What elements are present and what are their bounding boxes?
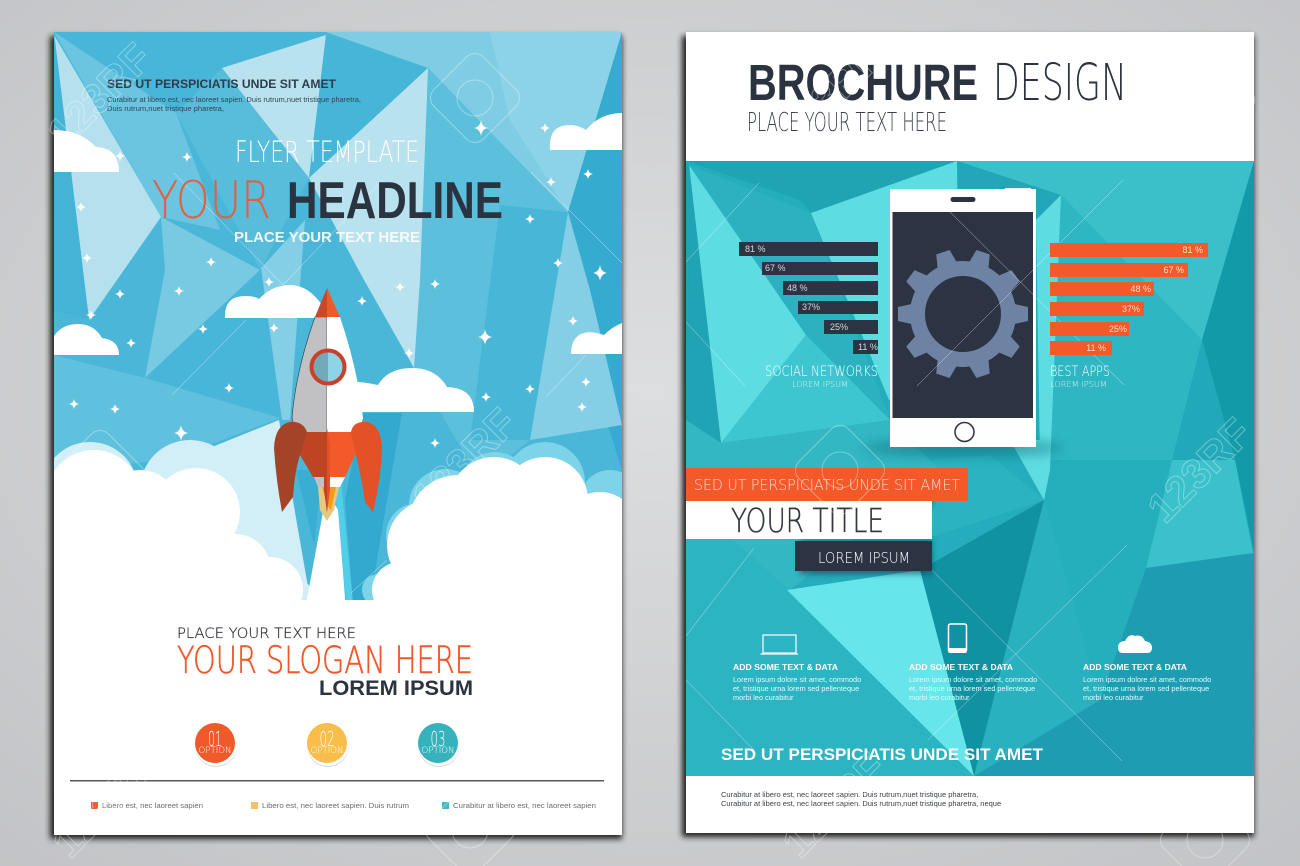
watermark marks: 123RF	[38, 34, 161, 156]
option badge 03	[418, 723, 460, 767]
intro text	[107, 97, 361, 113]
label: social networks: LOREM IPSUM	[792, 380, 848, 389]
bar chart: social networks: 11 %	[858, 342, 878, 352]
slogan block: LOREM IPSUM	[319, 677, 473, 700]
icon: phone	[948, 624, 966, 653]
bar chart: social networks: 81 %	[745, 244, 766, 254]
label: best apps: BEST APPS	[1050, 364, 1110, 380]
watermark marks: 123RF	[768, 34, 891, 156]
footer text: Curabitur at libero est, nec laoreet sapien. Duis rutrum,nuet tristique pharetra, neque	[721, 799, 1001, 808]
feature column 1: Lorem ipsum dolore sit amet, commodo	[733, 675, 861, 684]
smoke halo clouds	[54, 440, 622, 600]
headline: HEADLINE	[287, 172, 503, 230]
brochure title: BROCHURE	[748, 54, 978, 111]
feature column 3: ADD SOME TEXT & DATA	[1083, 662, 1187, 672]
phone mockup	[890, 188, 1036, 447]
intro text: Duis rutrum,nuet tristique pharetra,	[107, 106, 224, 113]
feature column 3: Lorem ipsum dolore sit amet, commodo	[1083, 675, 1211, 684]
watermark marks: 123RF	[43, 744, 166, 866]
option badge 01	[195, 723, 237, 767]
feature column 1: morbi leo curabitur	[733, 693, 794, 702]
legend	[91, 801, 596, 810]
feature column 2: ADD SOME TEXT & DATA	[909, 662, 1013, 672]
legend: Curabitur at libero est, nec laoreet sapien	[453, 801, 596, 810]
option badge 03: OPTION	[422, 746, 454, 756]
headline	[152, 171, 503, 231]
option badge 02	[307, 723, 349, 767]
option badge 02: 02	[320, 727, 334, 751]
label: social networks	[765, 364, 878, 389]
bar chart: best apps: 37%	[1122, 304, 1140, 314]
icon: rocket	[274, 288, 382, 521]
legend: Libero est, nec laoreet sapien	[102, 801, 203, 810]
feature column 3	[1083, 662, 1211, 702]
bottom heading: SED UT PERSPICIATIS UNDE SIT AMET	[721, 745, 1044, 764]
ribbon: dark	[795, 541, 932, 571]
heading: small intro: SED UT PERSPICIATIS UNDE SIT AMET	[107, 77, 337, 91]
slogan block	[177, 626, 473, 700]
bar chart: best apps: 81 %	[1182, 245, 1203, 255]
bar chart: social networks: 48 %	[787, 283, 808, 293]
watermark marks: 123RF	[773, 744, 896, 866]
ribbon: white title: YOUR TITLE	[731, 501, 884, 540]
bar chart: best apps: 11 %	[1086, 343, 1106, 353]
option badge 03: 03	[430, 727, 446, 751]
brochure subtitle: PLACE YOUR TEXT HERE	[747, 108, 947, 138]
bar chart: best apps	[1050, 243, 1208, 355]
label: best apps	[1050, 364, 1110, 389]
slogan block: PLACE YOUR TEXT HERE	[177, 626, 356, 642]
ribbon shadows	[700, 498, 932, 574]
panel: flyer page	[2, 32, 640, 839]
polygon sky background	[54, 32, 622, 612]
legend: Libero est, nec laoreet sapien. Duis rutrum	[262, 801, 409, 810]
feature column 1	[733, 662, 861, 702]
bar chart: social networks	[739, 242, 878, 354]
ribbon: orange: SED UT PERSPICIATIS UNDE SIT AMET	[694, 476, 960, 494]
feature column 1: et, tristique urna lorem sed pellenteque	[733, 684, 859, 693]
option badge 01: 01	[208, 727, 222, 751]
brochure title: DESIGN	[993, 54, 1127, 113]
bar chart: best apps: 48 %	[1130, 284, 1151, 294]
feature column 2	[909, 662, 1037, 702]
thin diagonal lines	[686, 183, 1127, 761]
phone crossing lines	[917, 180, 1124, 386]
phone shadow	[864, 441, 1064, 455]
feature column 2: et, tristique urna lorem sed pellenteque	[909, 684, 1035, 693]
heading: flyer template: FLYER TEMPLATE	[235, 135, 419, 169]
footer text: Curabitur at libero est, nec laoreet sapien. Duis rutrum,nuet tristique pharetra,	[721, 790, 978, 799]
watermark marks: 123RF	[403, 399, 526, 521]
sky clouds	[54, 113, 622, 412]
option badge 01: OPTION	[198, 746, 232, 756]
thin diagonal lines	[172, 172, 622, 593]
feature column 2: morbi leo curabitur	[909, 693, 970, 702]
feature column 2: Lorem ipsum dolore sit amet, commodo	[909, 675, 1037, 684]
smoke clouds	[54, 450, 622, 624]
polygon teal background	[686, 161, 1254, 776]
ribbon: orange	[686, 468, 968, 501]
panel: brochure page	[682, 32, 1254, 837]
slogan block: YOUR SLOGAN HERE	[177, 639, 473, 682]
feature column 3: morbi leo curabitur	[1083, 693, 1144, 702]
icon: cloud	[1118, 635, 1152, 653]
feature column 3: et, tristique urna lorem sed pellenteque	[1083, 684, 1209, 693]
bar chart: social networks: 25%	[830, 322, 848, 332]
intro text: Curabitur at libero est, nec laoreet sapien. Duis rutrum,nuet tristique pharetra,	[107, 97, 361, 104]
stars	[69, 120, 607, 448]
bar chart: social networks: 37%	[802, 302, 820, 312]
bar chart: best apps: 67 %	[1163, 265, 1184, 275]
watermark marks: 123RF	[1138, 409, 1261, 531]
bar chart: best apps: 25%	[1109, 324, 1127, 334]
headline: YOUR	[152, 171, 271, 231]
label: best apps: LOREM IPSUM	[1050, 380, 1107, 389]
subheading: PLACE YOUR TEXT HERE	[234, 229, 420, 246]
option badge 02: OPTION	[310, 746, 344, 756]
icon: gear	[898, 249, 1028, 379]
icon: laptop	[760, 635, 798, 654]
ribbon: dark: LOREM IPSUM	[818, 549, 910, 567]
label: social networks: SOCIAL NETWORKS	[765, 364, 878, 380]
feature column 1: ADD SOME TEXT & DATA	[733, 662, 838, 672]
bar chart: social networks: 67 %	[765, 263, 786, 273]
